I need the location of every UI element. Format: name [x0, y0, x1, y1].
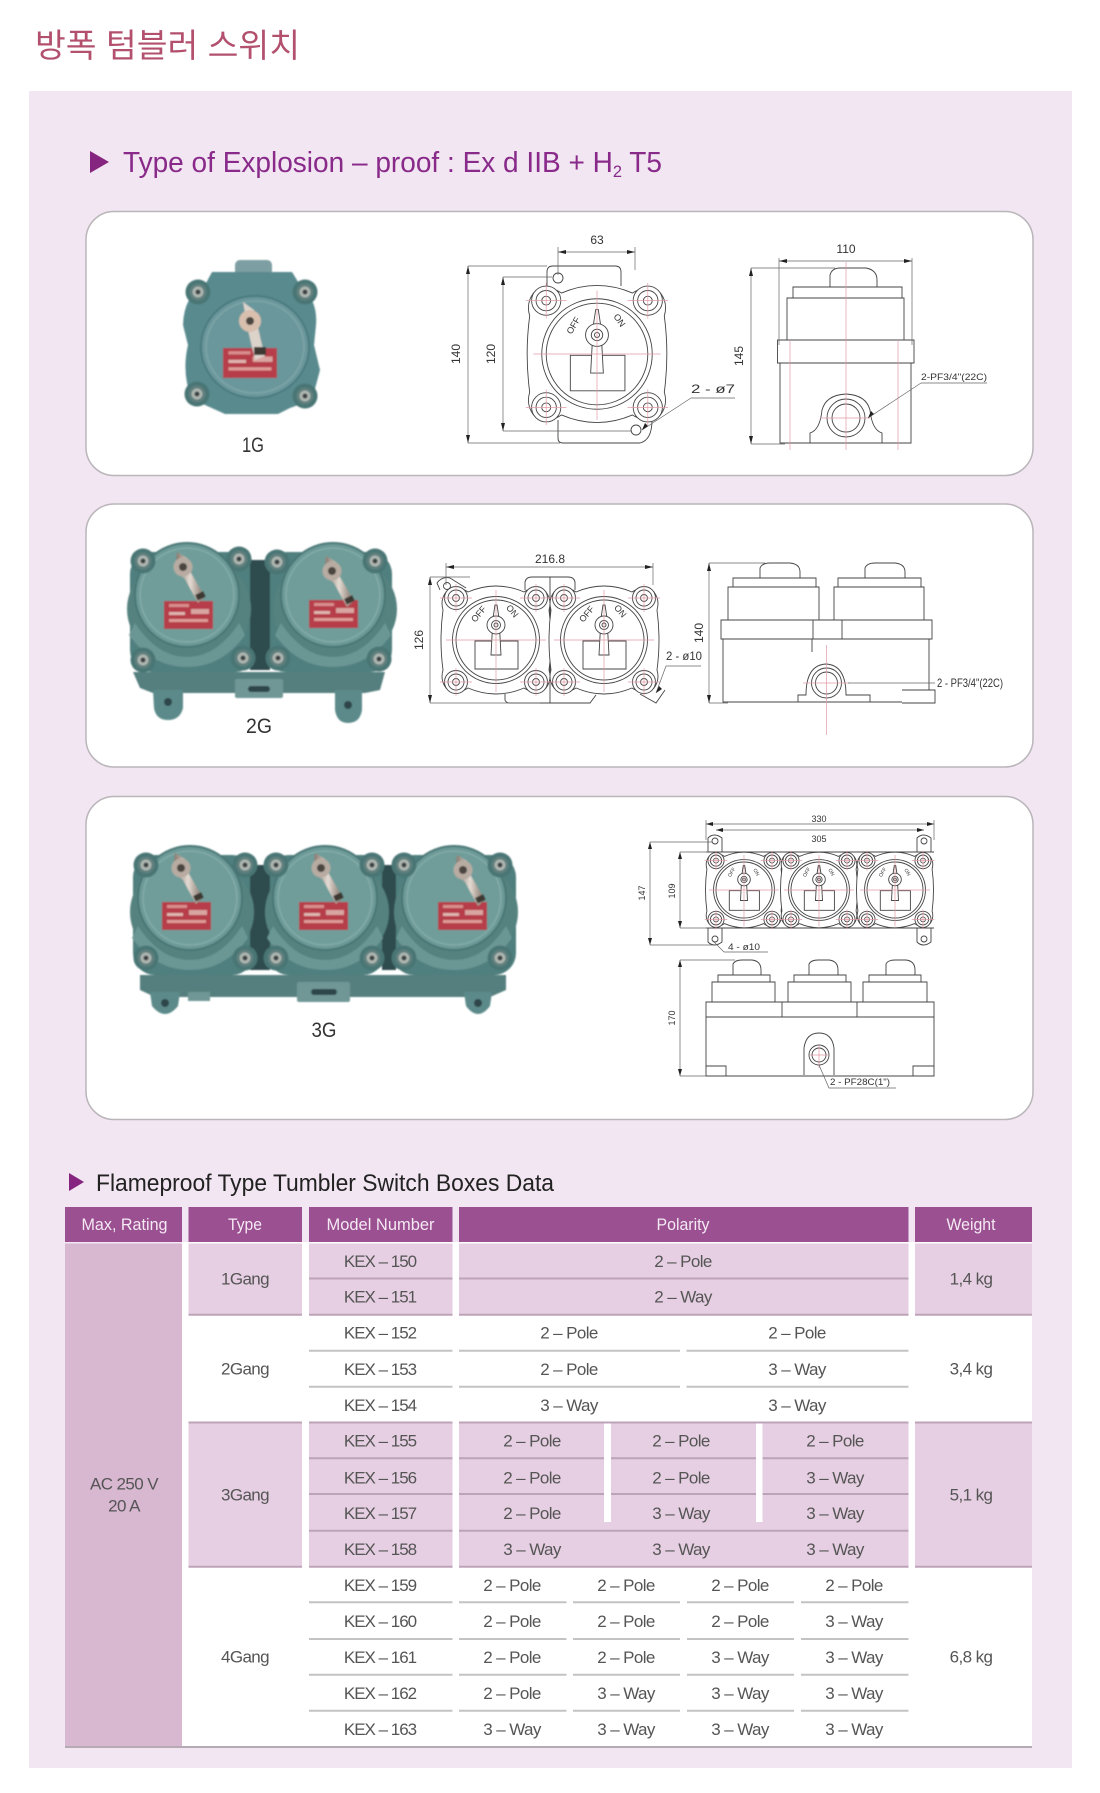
column: max rating: [65, 1244, 182, 1746]
text: OFF ON: OFF: [802, 867, 812, 878]
drawing: 3G side view: 170: [667, 1010, 677, 1026]
rows: 4Gang: 2 – Pole: [483, 1648, 541, 1667]
text: OFF ON: ON: [751, 868, 761, 878]
heading: table: Flameproof Type Tumbler Switch Boxes Data: [96, 1170, 555, 1197]
rows: 2Gang: [221, 1323, 992, 1415]
drawing: 2G side view: [692, 563, 1003, 735]
drawing: 2G front view: 216.8: [535, 552, 565, 566]
drawing: 1G front view: 2 - ø7: [691, 382, 735, 396]
rows: 4Gang: 3 – Way: [597, 1720, 656, 1739]
rows: 3Gang: 3 – Way: [806, 1504, 865, 1523]
rows: 4Gang: 2 – Pole: [483, 1684, 541, 1703]
rows: 2Gang: 3,4 kg: [950, 1359, 992, 1378]
rows: 2Gang: 3 – Way: [768, 1360, 827, 1379]
drawing: 2G front view: 126: [412, 630, 426, 650]
label: 3G: 3G: [312, 1019, 336, 1042]
rows: 4Gang: 3 – Way: [825, 1612, 884, 1631]
rows: 4Gang: KEX – 162: [344, 1684, 417, 1703]
text: OFF ON: [565, 312, 627, 336]
drawing: 2G front view: 2 - ø10: [666, 649, 702, 663]
rows: 1Gang: [188, 1244, 1032, 1315]
rows: 3Gang: 2 – Pole: [652, 1468, 710, 1487]
drawing: 3G front view: 147: [637, 885, 647, 901]
rows: 3Gang: 3 – Way: [503, 1540, 562, 1559]
text: OFF ON: ON: [504, 603, 520, 619]
drawing: 1G front view: 120: [484, 344, 498, 364]
rows: 3Gang: KEX – 158: [344, 1540, 417, 1559]
text: OFF ON: ON: [611, 312, 627, 329]
rows: 2Gang: 2 – Pole: [540, 1323, 598, 1342]
rows: 4Gang: 3 – Way: [711, 1648, 770, 1667]
table header: Model Number: [326, 1215, 435, 1234]
rows: 1Gang: 1,4 kg: [950, 1269, 992, 1288]
rows: 1Gang: 2 – Pole: [654, 1252, 712, 1271]
rows: 3Gang: 2 – Pole: [503, 1504, 561, 1523]
photo: 3G switch: [130, 846, 518, 1014]
rows: 2Gang: 2 – Pole: [540, 1360, 598, 1379]
rows: 4Gang: 2 – Pole: [597, 1576, 655, 1595]
drawing: 1G front view: [449, 233, 735, 443]
drawing: 2G front view: [412, 552, 702, 703]
rows: 3Gang: 5,1 kg: [950, 1485, 992, 1504]
rows: 2Gang: 2Gang: [221, 1359, 269, 1378]
drawing: 3G front view: 4 - ø10: [728, 942, 760, 952]
rows: 4Gang: 6,8 kg: [950, 1647, 992, 1666]
rows: 3Gang: 3 – Way: [652, 1540, 711, 1559]
photo: 1G switch: [183, 260, 320, 414]
rows: 4Gang: KEX – 161: [344, 1648, 417, 1667]
rows: 3Gang: 3 – Way: [806, 1468, 865, 1487]
label: 2G: 2G: [246, 715, 272, 738]
drawing: 3G side view: [667, 960, 934, 1088]
rows: 4Gang: 2 – Pole: [483, 1576, 541, 1595]
rows: 2Gang: KEX – 154: [344, 1396, 417, 1415]
rows: 4Gang: 2 – Pole: [825, 1576, 883, 1595]
text: OFF ON: OFF: [727, 867, 737, 878]
column: max rating: 20 A: [108, 1496, 141, 1515]
text: OFF ON: [469, 603, 628, 624]
drawing: 3G front view: 305: [811, 834, 827, 844]
rows: 4Gang: 3 – Way: [825, 1684, 884, 1703]
heading: type of explosion-proof: T5: [622, 147, 662, 179]
table header: Polarity: [656, 1215, 710, 1234]
panel: 2G card: [86, 504, 1033, 767]
rows: 3Gang: KEX – 155: [344, 1431, 417, 1450]
rows: 4Gang: 3 – Way: [483, 1720, 542, 1739]
rows: 1Gang: KEX – 151: [344, 1287, 417, 1306]
rows: 4Gang: 3 – Way: [597, 1684, 656, 1703]
rows: 2Gang: 3 – Way: [540, 1396, 599, 1415]
drawing: 2G side view: 140: [692, 623, 706, 643]
table header: [65, 1207, 1032, 1242]
table header: Weight: [946, 1215, 996, 1234]
drawing: 1G side view: 2-PF3/4"(22C): [921, 372, 987, 382]
rows: 1Gang: KEX – 150: [344, 1252, 417, 1271]
rows: 2Gang: 2 – Pole: [768, 1323, 826, 1342]
drawing: 3G front view: 330: [811, 814, 827, 824]
rows: 4Gang: KEX – 163: [344, 1720, 417, 1739]
rows: 4Gang: 2 – Pole: [483, 1612, 541, 1631]
drawing: 3G side view: 2 - PF28C(1"): [830, 1077, 890, 1087]
rows: 3Gang: [188, 1422, 1032, 1567]
photo: 2G switch: [127, 543, 397, 723]
text: OFF ON: OFF: [878, 867, 888, 878]
rows: 3Gang: 3 – Way: [806, 1540, 865, 1559]
rows: 4Gang: KEX – 160: [344, 1612, 417, 1631]
rows: 4Gang: 2 – Pole: [597, 1612, 655, 1631]
rows: 3Gang: 2 – Pole: [503, 1468, 561, 1487]
text: OFF ON: ON: [902, 868, 912, 878]
title: 방폭 텀블러 스위치: [35, 19, 300, 67]
panel: 1G card: [86, 212, 1033, 476]
rows: 4Gang: [221, 1576, 992, 1739]
rows: 2Gang: KEX – 153: [344, 1360, 417, 1379]
rows: 2Gang: 3 – Way: [768, 1396, 827, 1415]
rows: 3Gang: 3Gang: [221, 1485, 269, 1504]
rows: 1Gang: 1Gang: [221, 1269, 269, 1288]
table header: Type: [228, 1215, 262, 1234]
text: OFF ON: ON: [612, 603, 628, 619]
table: switch boxes data: [65, 1207, 1032, 1747]
column: max rating: AC 250 V: [90, 1474, 159, 1493]
text: OFF ON: OFF: [469, 604, 489, 624]
rows: 1Gang: 2 – Way: [654, 1287, 713, 1306]
rows: 3Gang: KEX – 156: [344, 1468, 417, 1487]
rows: 4Gang: 3 – Way: [711, 1720, 770, 1739]
drawing: 3G front view: [637, 814, 934, 952]
drawing: 1G side view: [732, 242, 987, 450]
drawing: 2G side view: 2 - PF3/4"(22C): [937, 676, 1003, 690]
text: OFF ON: OFF: [565, 315, 582, 336]
rows: 2Gang: KEX – 152: [344, 1323, 417, 1342]
label: 1G: 1G: [242, 434, 264, 457]
drawing: 1G front view: 63: [590, 233, 604, 247]
drawing: 1G side view: 110: [836, 242, 856, 256]
rows: 4Gang: KEX – 159: [344, 1576, 417, 1595]
drawing: 1G side view: 145: [732, 346, 746, 366]
text: OFF ON: ON: [826, 868, 836, 878]
rows: 4Gang: 3 – Way: [711, 1684, 770, 1703]
text: OFF ON: OFF: [577, 604, 597, 624]
drawing: 3G front view: 109: [667, 883, 677, 899]
panel: 3G card: [86, 796, 1033, 1120]
rows: 3Gang: 2 – Pole: [806, 1431, 864, 1450]
rows: 4Gang: 3 – Way: [825, 1648, 884, 1667]
text: OFF ON: [727, 867, 912, 878]
heading: type of explosion-proof: 2: [613, 162, 622, 181]
rows: 4Gang: 2 – Pole: [597, 1648, 655, 1667]
rows: 3Gang: KEX – 157: [344, 1504, 417, 1523]
table header: Max, Rating: [82, 1215, 168, 1234]
rows: 4Gang: 3 – Way: [825, 1720, 884, 1739]
heading: type of explosion-proof: Type of Explosion – proof : Ex d IIB + H: [123, 147, 630, 179]
drawing: 1G front view: 140: [449, 344, 463, 364]
rows: 3Gang: 2 – Pole: [652, 1431, 710, 1450]
rows: 3Gang: 2 – Pole: [503, 1431, 561, 1450]
rows: 4Gang: 4Gang: [221, 1647, 269, 1666]
rows: 4Gang: 2 – Pole: [711, 1612, 769, 1631]
rows: 3Gang: 3 – Way: [652, 1504, 711, 1523]
rows: 4Gang: 2 – Pole: [711, 1576, 769, 1595]
